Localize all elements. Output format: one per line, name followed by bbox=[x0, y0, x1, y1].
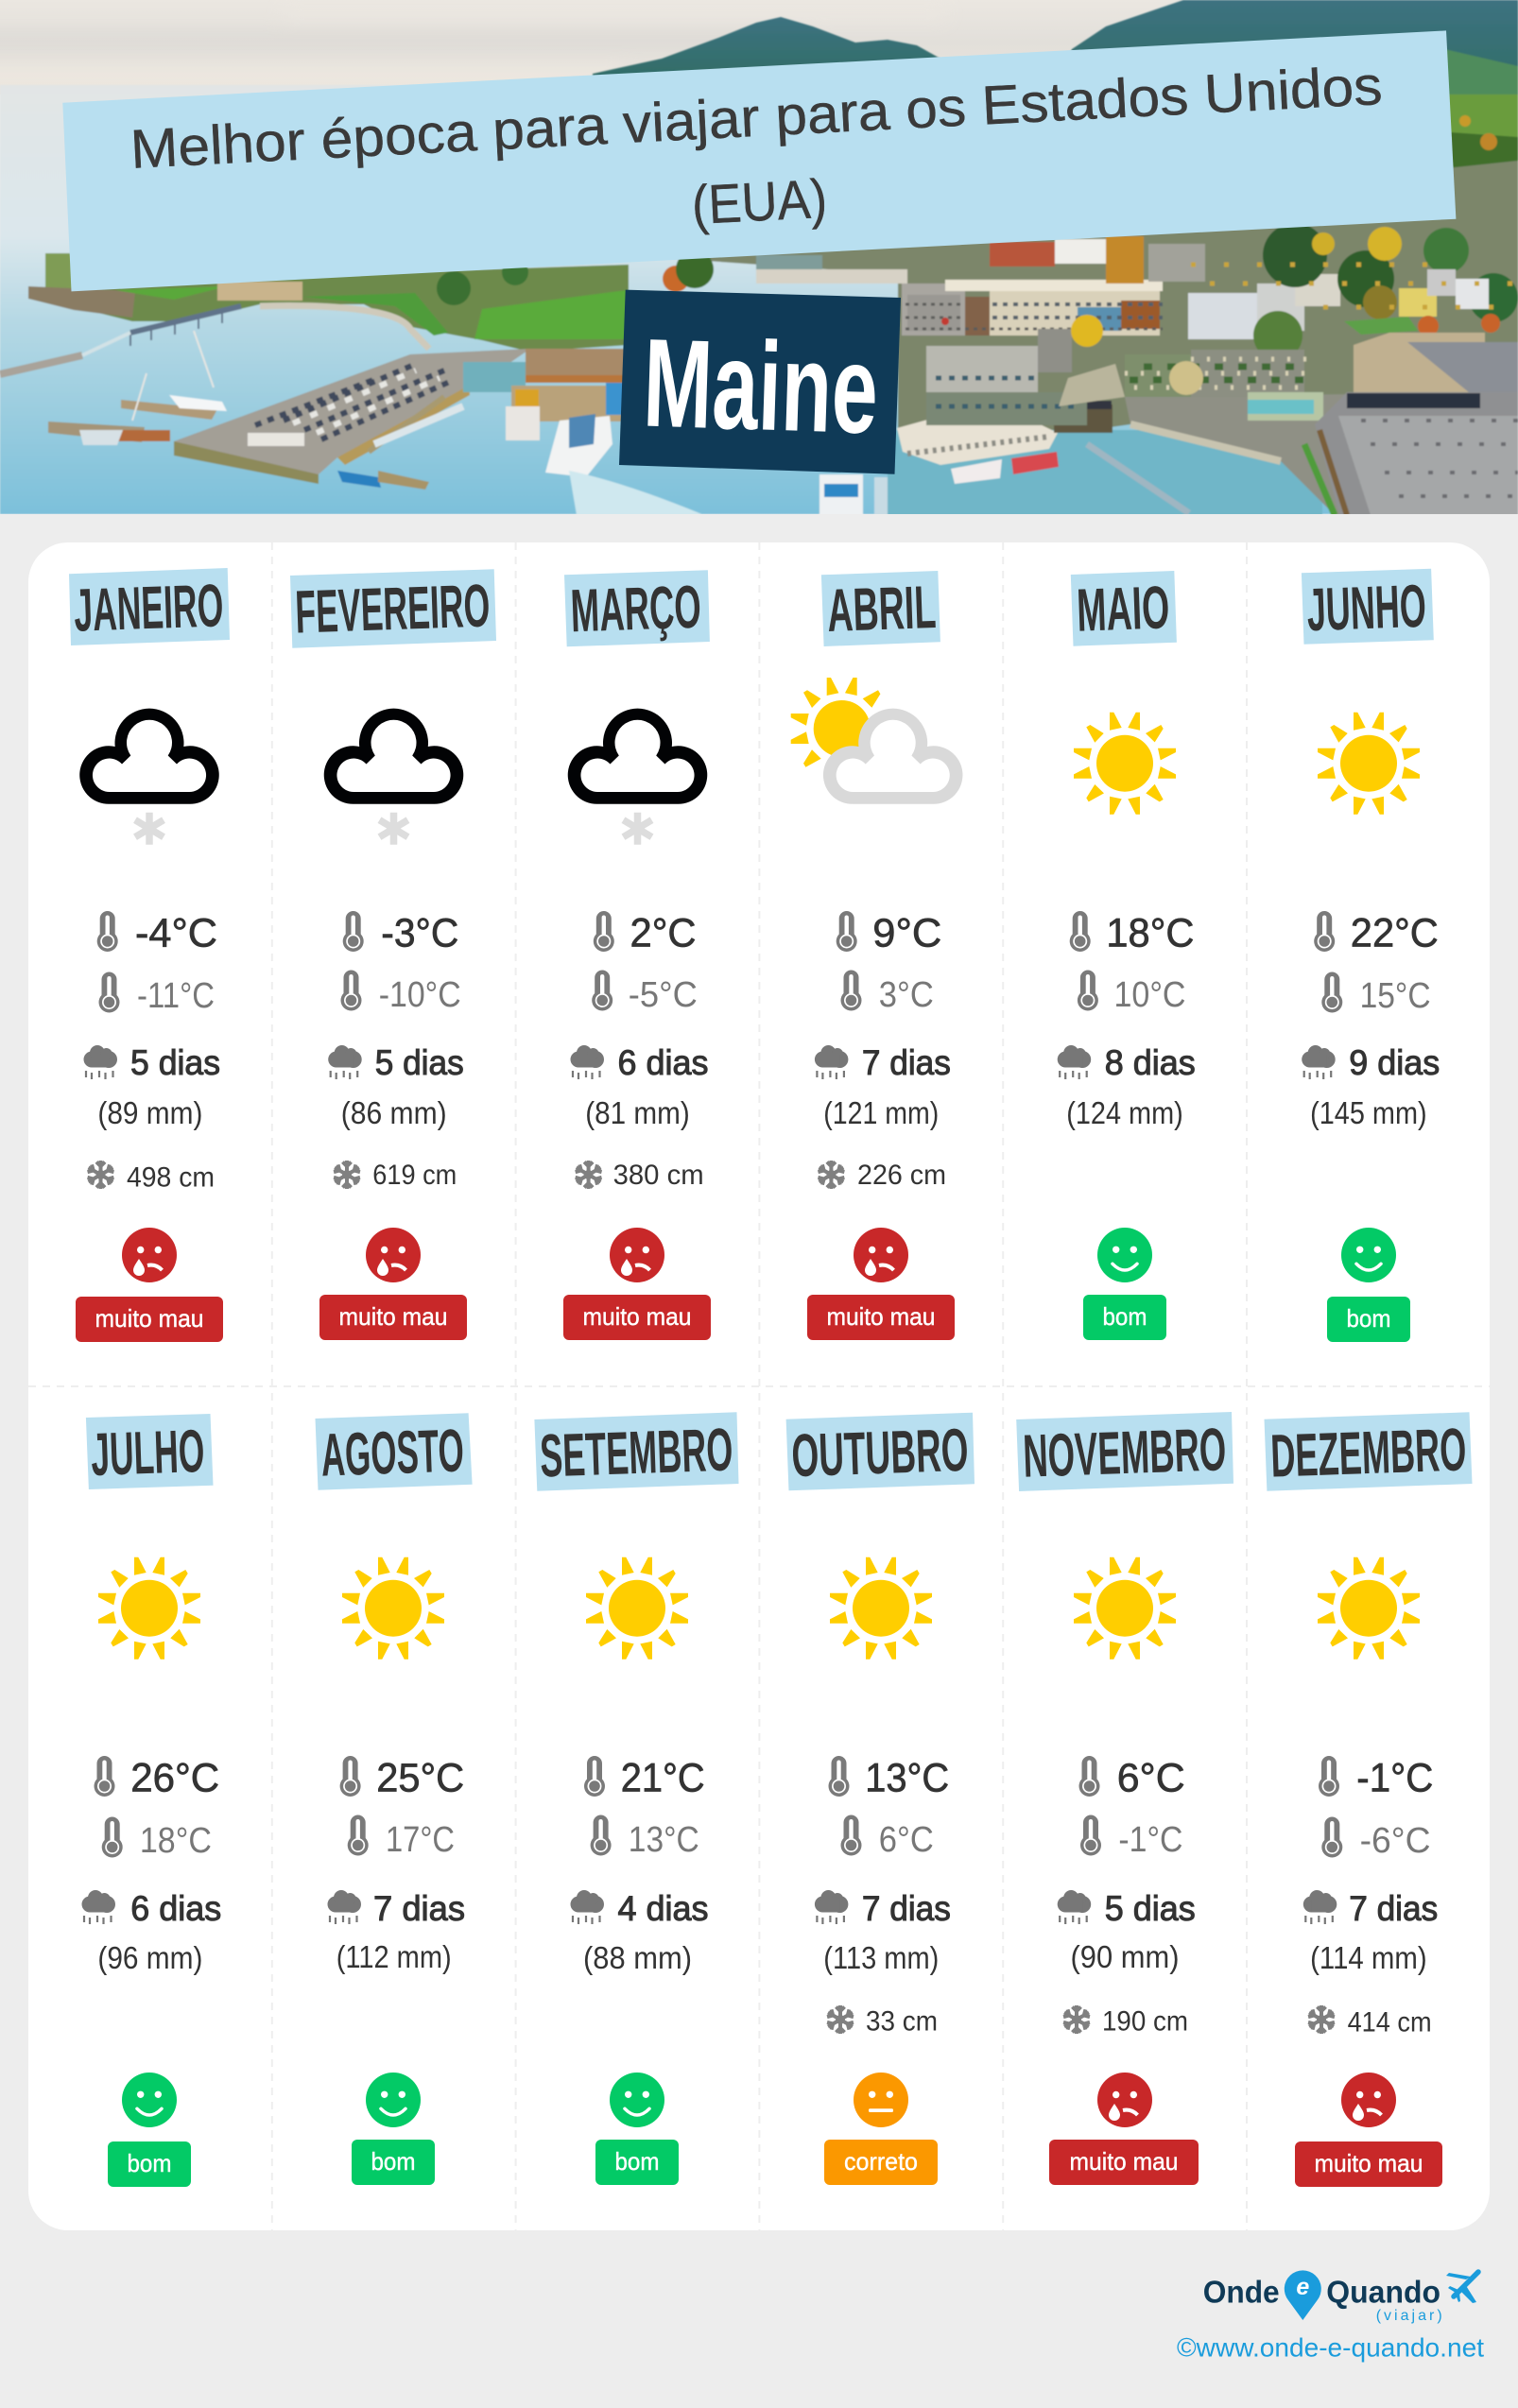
rating: bom: bom bbox=[127, 2149, 172, 2177]
min temperature: 10°C bbox=[1113, 975, 1185, 1015]
rating: muito mau: muito mau bbox=[582, 1302, 692, 1331]
month heading: abril: ABRIL bbox=[826, 573, 937, 645]
rain days bbox=[1303, 1889, 1438, 1928]
rating: bom bbox=[595, 2073, 679, 2185]
month heading: abril bbox=[821, 571, 940, 646]
column: julho bbox=[81, 1414, 221, 2187]
snowfall: 619 cm bbox=[372, 1160, 457, 1191]
column: dezembro bbox=[1265, 1412, 1473, 2187]
month heading: julho bbox=[86, 1414, 214, 1489]
min temperature bbox=[1078, 970, 1185, 1015]
rating: bom: bom bbox=[371, 2147, 416, 2176]
min temperature: 15°C bbox=[1360, 976, 1431, 1016]
logo: Onde e Quando viajar: Quando bbox=[1326, 2275, 1440, 2310]
snowfall: 414 cm bbox=[1348, 2007, 1432, 2038]
icon: sun bbox=[586, 1557, 688, 1660]
rating: muito mau bbox=[76, 1228, 223, 1342]
title text bbox=[129, 55, 1384, 236]
snowfall bbox=[1307, 2005, 1432, 2038]
rain days bbox=[815, 1043, 951, 1082]
rating: muito mau: muito mau bbox=[1070, 2147, 1178, 2176]
icon: snow cloud bbox=[79, 709, 219, 845]
min temperature bbox=[102, 1816, 212, 1861]
rating: bom bbox=[108, 2073, 191, 2187]
title text: (EUA) bbox=[690, 168, 828, 236]
min temperature bbox=[592, 970, 698, 1015]
rating: muito mau bbox=[807, 1228, 955, 1340]
month heading: fevereiro bbox=[290, 569, 496, 648]
column: novembro bbox=[1016, 1412, 1233, 2185]
rainfall: (124 mm) bbox=[1066, 1095, 1183, 1130]
rain days bbox=[83, 1043, 220, 1082]
rainfall: (81 mm) bbox=[585, 1095, 690, 1130]
min temperature bbox=[340, 970, 461, 1015]
rating: correto: correto bbox=[844, 2147, 918, 2176]
max temperature bbox=[340, 1756, 464, 1801]
min temperature: 6°C bbox=[879, 1820, 934, 1860]
icon: location pin: e bbox=[1296, 2274, 1309, 2300]
rating: correto bbox=[824, 2073, 938, 2185]
month heading: outubro: OUTUBRO bbox=[790, 1416, 970, 1489]
rain days bbox=[571, 1889, 709, 1928]
min temperature bbox=[591, 1815, 699, 1860]
max temperature: 21°C bbox=[621, 1756, 705, 1801]
max temperature: 2°C bbox=[630, 911, 696, 956]
max temperature bbox=[584, 1756, 705, 1801]
snowfall bbox=[1062, 2005, 1188, 2037]
rating: muito mau bbox=[1295, 2073, 1442, 2187]
max temperature bbox=[1070, 911, 1194, 956]
icon: sun bbox=[1318, 1557, 1420, 1660]
column: abril bbox=[791, 571, 962, 1340]
rating: muito mau bbox=[563, 1228, 711, 1340]
rain days: 5 dias bbox=[375, 1043, 464, 1082]
hero photo: aerial view of Bar Harbor, Maine bbox=[0, 0, 1518, 515]
snowfall: 190 cm bbox=[1102, 2005, 1188, 2037]
month heading: setembro bbox=[534, 1412, 739, 1491]
logo: Onde e Quando viajar: Onde bbox=[1203, 2275, 1280, 2310]
month heading: outubro bbox=[786, 1413, 975, 1490]
icon: sun bbox=[1318, 713, 1420, 815]
rain days bbox=[81, 1889, 221, 1928]
title text: Melhor época para viajar para os Estados Unidos bbox=[129, 55, 1384, 181]
snowfall bbox=[333, 1160, 457, 1191]
rainfall: (96 mm) bbox=[97, 1940, 202, 1975]
rain days: 8 dias bbox=[1105, 1043, 1196, 1082]
snowfall: 33 cm bbox=[866, 2005, 938, 2037]
rain days bbox=[1302, 1043, 1440, 1082]
rating: bom bbox=[352, 2073, 435, 2185]
icon: sun bbox=[1074, 1557, 1176, 1660]
rating: muito mau: muito mau bbox=[826, 1302, 936, 1331]
rainfall: (86 mm) bbox=[341, 1095, 447, 1130]
rating: muito mau: muito mau bbox=[1314, 2149, 1423, 2177]
rating: muito mau: muito mau bbox=[95, 1304, 204, 1333]
month heading: janeiro: JANEIRO bbox=[73, 571, 224, 645]
rain days bbox=[815, 1889, 951, 1928]
max temperature: 26°C bbox=[130, 1756, 219, 1801]
month heading: junho bbox=[1302, 569, 1434, 645]
rainfall: (121 mm) bbox=[823, 1095, 939, 1130]
min temperature: -1°C bbox=[1118, 1820, 1182, 1860]
rain days: 6 dias bbox=[130, 1889, 221, 1928]
icon: snow cloud bbox=[324, 709, 463, 845]
rainfall: (90 mm) bbox=[1070, 1939, 1180, 1974]
icon: snow cloud bbox=[568, 709, 707, 845]
rain days: 5 dias bbox=[130, 1043, 220, 1082]
max temperature bbox=[1314, 911, 1439, 956]
month heading: novembro: NOVEMBRO bbox=[1022, 1415, 1227, 1490]
logo: Onde e Quando viajar bbox=[1203, 2270, 1478, 2324]
icon: airplane bbox=[1446, 2272, 1478, 2303]
month heading: agosto bbox=[316, 1413, 473, 1490]
rainfall: (145 mm) bbox=[1310, 1095, 1427, 1130]
max temperature: -1°C bbox=[1356, 1756, 1433, 1801]
column: setembro bbox=[534, 1412, 739, 2185]
icon: sun bbox=[342, 1557, 444, 1660]
column: fevereiro bbox=[290, 569, 496, 1340]
month heading: fevereiro: FEVEREIRO bbox=[294, 571, 491, 646]
max temperature bbox=[97, 911, 217, 956]
snowfall bbox=[86, 1161, 215, 1194]
month heading: março bbox=[564, 570, 710, 646]
month heading: maio: MAIO bbox=[1076, 573, 1170, 645]
max temperature: -3°C bbox=[381, 911, 458, 956]
max temperature bbox=[95, 1756, 219, 1801]
rain days: 7 dias bbox=[862, 1043, 951, 1082]
max temperature bbox=[594, 911, 696, 956]
min temperature: 18°C bbox=[140, 1821, 212, 1861]
min temperature: -11°C bbox=[137, 976, 215, 1016]
month heading: junho: JUNHO bbox=[1306, 572, 1427, 644]
rain days bbox=[571, 1043, 709, 1082]
month heading: novembro bbox=[1016, 1412, 1233, 1491]
min temperature: -6°C bbox=[1360, 1821, 1431, 1861]
month heading: agosto: AGOSTO bbox=[320, 1416, 465, 1489]
column: março bbox=[563, 570, 711, 1340]
column: outubro bbox=[786, 1413, 975, 2185]
rating: bom bbox=[1327, 1228, 1410, 1342]
rain days bbox=[1058, 1889, 1196, 1928]
month heading: março: MARÇO bbox=[570, 573, 702, 645]
min temperature: -5°C bbox=[629, 975, 698, 1015]
max temperature bbox=[1079, 1756, 1185, 1801]
max temperature bbox=[837, 911, 941, 956]
rainfall: (114 mm) bbox=[1310, 1940, 1427, 1975]
rating: bom: bom bbox=[614, 2147, 660, 2176]
max temperature: 13°C bbox=[865, 1756, 949, 1801]
rain days: 5 dias bbox=[1105, 1889, 1196, 1928]
month heading: maio bbox=[1071, 571, 1177, 646]
icon: location pin bbox=[1285, 2270, 1321, 2320]
rainfall: (88 mm) bbox=[583, 1940, 692, 1975]
column: junho bbox=[1302, 569, 1440, 1342]
max temperature bbox=[1319, 1756, 1433, 1801]
rain days: 7 dias bbox=[1349, 1889, 1438, 1928]
max temperature: 22°C bbox=[1351, 911, 1439, 956]
min temperature bbox=[98, 972, 215, 1016]
max temperature: 25°C bbox=[376, 1756, 464, 1801]
rain days bbox=[1058, 1043, 1196, 1082]
rainfall: (89 mm) bbox=[97, 1095, 202, 1130]
max temperature: -4°C bbox=[135, 911, 217, 956]
state name box: Maine: Maine bbox=[642, 314, 880, 460]
min temperature: -10°C bbox=[379, 975, 461, 1015]
snowfall bbox=[826, 2005, 938, 2037]
rainfall: (113 mm) bbox=[823, 1940, 939, 1975]
max temperature bbox=[828, 1756, 949, 1801]
snowfall bbox=[817, 1160, 946, 1191]
min temperature: 17°C bbox=[386, 1820, 455, 1860]
rain days bbox=[328, 1043, 464, 1082]
min temperature bbox=[1080, 1815, 1182, 1860]
rating: muito mau: muito mau bbox=[338, 1302, 448, 1331]
max temperature bbox=[343, 911, 458, 956]
rain days: 9 dias bbox=[1349, 1043, 1440, 1082]
max temperature: 6°C bbox=[1117, 1756, 1185, 1801]
max temperature: 9°C bbox=[872, 911, 941, 956]
max temperature: 18°C bbox=[1106, 911, 1194, 956]
rating: muito mau bbox=[1049, 2073, 1199, 2185]
snowfall: 498 cm bbox=[127, 1162, 215, 1194]
rain days: 7 dias bbox=[373, 1889, 465, 1928]
min temperature bbox=[841, 1815, 934, 1860]
rating: bom bbox=[1083, 1228, 1166, 1340]
rain days: 6 dias bbox=[618, 1043, 709, 1082]
min temperature bbox=[1321, 1816, 1431, 1861]
rain days bbox=[327, 1889, 465, 1928]
rating: bom: bom bbox=[1346, 1304, 1391, 1333]
icon: sun bbox=[98, 1557, 200, 1660]
min temperature bbox=[348, 1815, 455, 1860]
icon: sun bbox=[1074, 713, 1176, 815]
min temperature bbox=[841, 970, 934, 1015]
panel: monthly climate card bbox=[28, 542, 1490, 2230]
rain days: 4 dias bbox=[618, 1889, 709, 1928]
icon: sun behind cloud bbox=[791, 678, 962, 804]
icon: sun bbox=[830, 1557, 932, 1660]
column: agosto bbox=[316, 1413, 473, 2185]
min temperature: 13°C bbox=[629, 1820, 699, 1860]
title banner bbox=[62, 30, 1456, 291]
month heading: julho: JULHO bbox=[90, 1417, 205, 1488]
snowfall: 226 cm bbox=[857, 1160, 946, 1191]
snowfall bbox=[574, 1160, 704, 1191]
column: janeiro bbox=[69, 568, 230, 1342]
month heading: setembro: SETEMBRO bbox=[539, 1415, 733, 1490]
rainfall: (112 mm) bbox=[336, 1939, 452, 1974]
column: maio bbox=[1058, 571, 1196, 1340]
state name box: Maine bbox=[619, 290, 901, 474]
website credit: ©www.onde-e-quando.net bbox=[1177, 2332, 1484, 2362]
logo: Onde e Quando viajar: (viajar) bbox=[1376, 2308, 1442, 2324]
snowfall: 380 cm bbox=[613, 1160, 704, 1191]
min temperature bbox=[1321, 972, 1431, 1016]
rating: muito mau bbox=[319, 1228, 467, 1340]
rating: bom: bom bbox=[1102, 1302, 1147, 1331]
month heading: janeiro bbox=[69, 568, 230, 645]
rain days: 7 dias bbox=[862, 1889, 951, 1928]
min temperature: 3°C bbox=[879, 975, 934, 1015]
